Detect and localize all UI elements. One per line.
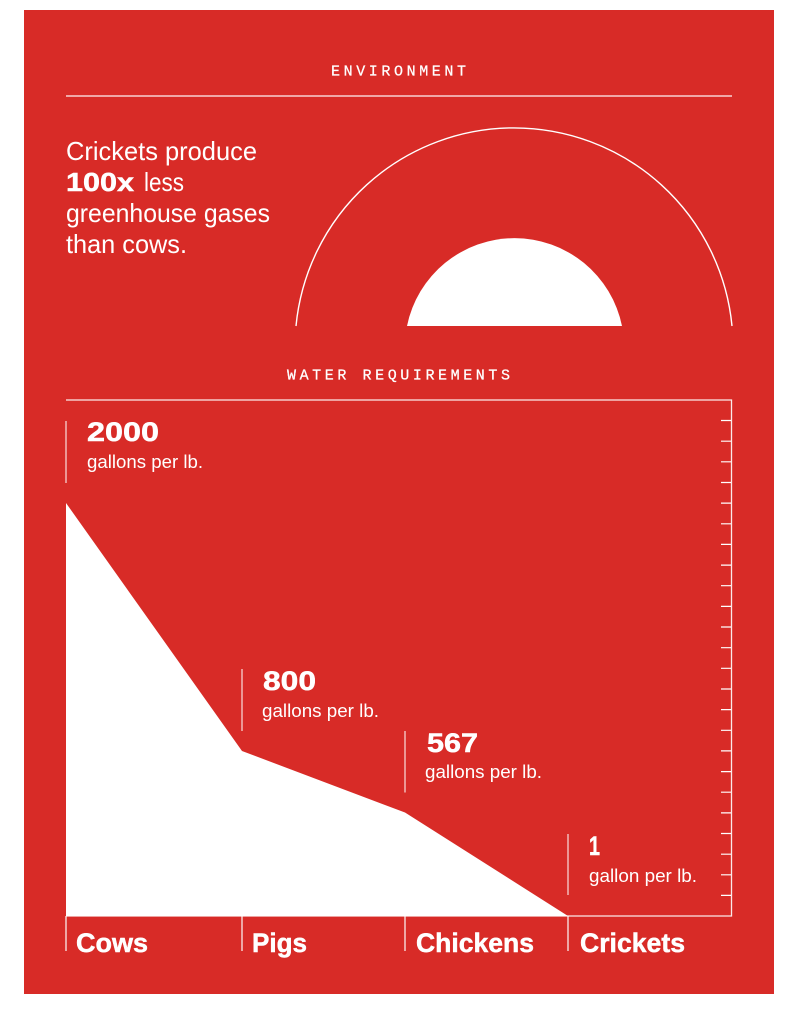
scale ticks (721, 420, 731, 895)
category labels (76, 928, 685, 958)
value: chickens: gallons per lb. (425, 761, 542, 782)
value: chickens: 567 (427, 728, 478, 758)
greenhouse gas statement: 100x (66, 167, 135, 197)
value: pigs (242, 666, 379, 731)
greenhouse gas statement (66, 136, 270, 259)
category labels: Cows (76, 928, 148, 958)
value: cows (66, 417, 203, 483)
white area (66, 503, 568, 916)
category labels: Pigs (252, 928, 307, 958)
greenhouse gas statement: greenhouse gases (66, 198, 270, 228)
cows outline arc (296, 128, 732, 326)
water requirements area chart (66, 400, 732, 951)
column dividers (66, 916, 568, 951)
greenhouse gas statement: Crickets produce (66, 136, 257, 166)
crickets filled arc (407, 238, 622, 326)
category labels: Chickens (416, 928, 534, 958)
category labels: Crickets (580, 928, 685, 958)
value: pigs: gallons per lb. (262, 700, 379, 721)
value: crickets: 1 (589, 831, 600, 861)
value: pigs: 800 (263, 666, 316, 696)
greenhouse gas statement: than cows. (66, 229, 187, 259)
chart frame (66, 400, 732, 916)
value: cows: 2000 (87, 417, 159, 447)
value: crickets: gallon per lb. (589, 865, 697, 886)
semicircle comparison chart (296, 128, 732, 326)
section heading: water requirements: WATER REQUIREMENTS (287, 368, 510, 384)
greenhouse gas statement: less (144, 167, 184, 197)
value: chickens (405, 728, 542, 792)
section heading: environment: ENVIRONMENT (331, 64, 466, 80)
value: cows: gallons per lb. (87, 451, 203, 472)
value: crickets (568, 831, 697, 895)
